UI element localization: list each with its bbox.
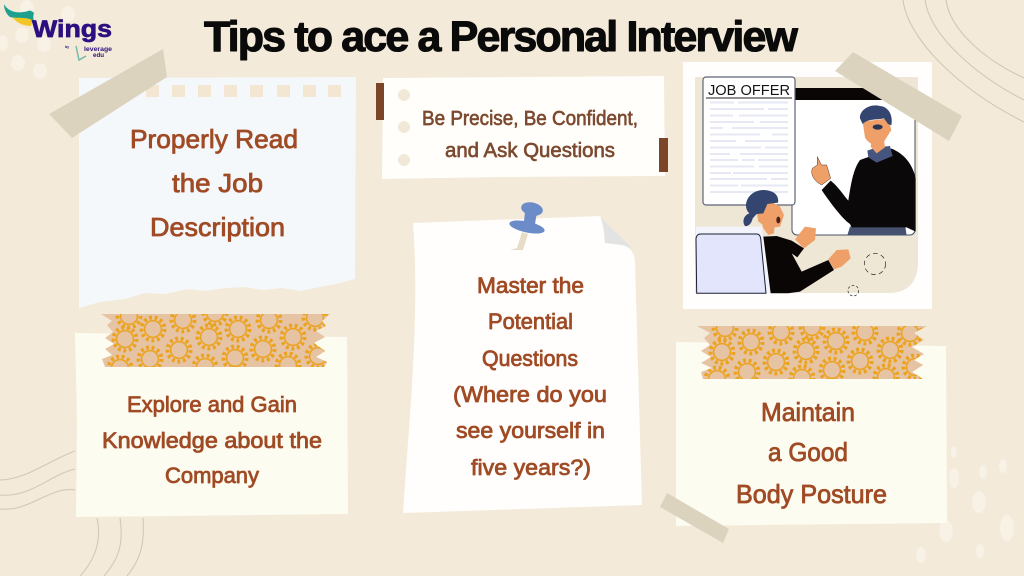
woman figure xyxy=(743,190,886,296)
paper punch holes xyxy=(146,85,341,97)
woman face xyxy=(757,200,784,228)
logo: Wings by Leverage Edu xyxy=(4,4,112,60)
pin neck xyxy=(523,212,537,230)
panel: master the potential questions xyxy=(403,200,642,513)
panel text: and Ask Questions xyxy=(445,140,615,162)
body and arms xyxy=(763,236,834,293)
raised hand xyxy=(812,157,831,185)
panel text: Properly Read xyxy=(130,124,298,154)
woman mouth xyxy=(776,217,780,223)
document text lines xyxy=(710,102,788,192)
woman hair xyxy=(743,190,778,226)
panel text: Explore and Gain xyxy=(127,392,297,417)
panel text: Questions xyxy=(482,346,578,371)
panel text: Description xyxy=(150,212,285,242)
window top bar xyxy=(795,88,885,100)
panel text xyxy=(130,124,298,242)
panel: explore and gain knowledge xyxy=(75,302,348,517)
logo yellow swoosh xyxy=(13,17,33,26)
logo wordmark: Wings xyxy=(32,16,112,43)
panel text: (Where do you xyxy=(453,382,607,407)
brown tab right xyxy=(659,138,668,172)
pin needle xyxy=(510,232,528,250)
fold shadow xyxy=(600,217,632,248)
panel text: Master the xyxy=(477,273,584,298)
glasses xyxy=(873,124,883,130)
face xyxy=(863,118,891,145)
note paper xyxy=(75,333,348,517)
panel text xyxy=(453,273,607,480)
dashed circles xyxy=(864,253,886,275)
panel text: Potential xyxy=(488,309,573,334)
logo teal swoosh xyxy=(4,4,34,21)
woman neck xyxy=(762,222,775,235)
note paper xyxy=(382,76,665,179)
panel text: five years?) xyxy=(471,455,591,480)
panel text: see yourself in xyxy=(456,418,605,443)
logo by-line: edu xyxy=(93,52,104,59)
panel text: Maintain xyxy=(761,397,855,427)
document heading: JOB OFFER xyxy=(708,82,790,99)
job offer document xyxy=(703,77,795,205)
panel: properly read the job description xyxy=(49,49,356,308)
sun patterned washi tape xyxy=(697,326,927,379)
sun patterned washi tape xyxy=(101,314,330,367)
panel text xyxy=(736,397,887,509)
panel: maintain a good body posture xyxy=(660,316,947,543)
binder dots xyxy=(398,89,410,166)
collar xyxy=(867,146,893,163)
window xyxy=(792,99,915,235)
chair xyxy=(696,227,771,293)
white photo card xyxy=(683,62,932,309)
pinned note xyxy=(403,216,642,513)
near hand xyxy=(828,249,851,269)
pin head xyxy=(520,200,544,218)
panel text xyxy=(102,392,322,488)
panel: be precise be confident xyxy=(376,76,668,179)
scene illustration xyxy=(695,77,918,293)
torso and arms xyxy=(822,149,916,232)
masking tape on card xyxy=(835,52,962,141)
trousers xyxy=(847,227,907,235)
panel text xyxy=(422,108,638,162)
logo by-line: leverage xyxy=(84,46,112,53)
panel text: Be Precise, Be Confident, xyxy=(422,108,638,130)
panel text: the Job xyxy=(172,168,263,198)
panel text: Company xyxy=(165,463,259,488)
panel text: Body Posture xyxy=(736,479,887,509)
pin base xyxy=(508,218,546,236)
panel text: a Good xyxy=(768,437,848,467)
masking tape xyxy=(49,49,167,138)
torn notebook paper xyxy=(79,77,356,308)
small masking tape xyxy=(660,493,729,543)
panel text: Knowledge about the xyxy=(102,428,322,453)
neck xyxy=(871,140,885,153)
brown tab left xyxy=(376,83,384,120)
logo by-line xyxy=(65,45,112,60)
pin xyxy=(508,200,546,250)
note paper xyxy=(676,342,947,526)
logo by-line: by xyxy=(65,45,69,49)
hair xyxy=(860,105,892,125)
man figure xyxy=(812,105,916,235)
far hand xyxy=(795,227,816,248)
panel: illustration job offer xyxy=(683,52,962,309)
title: Tips to ace a Personal Interview xyxy=(204,13,799,61)
